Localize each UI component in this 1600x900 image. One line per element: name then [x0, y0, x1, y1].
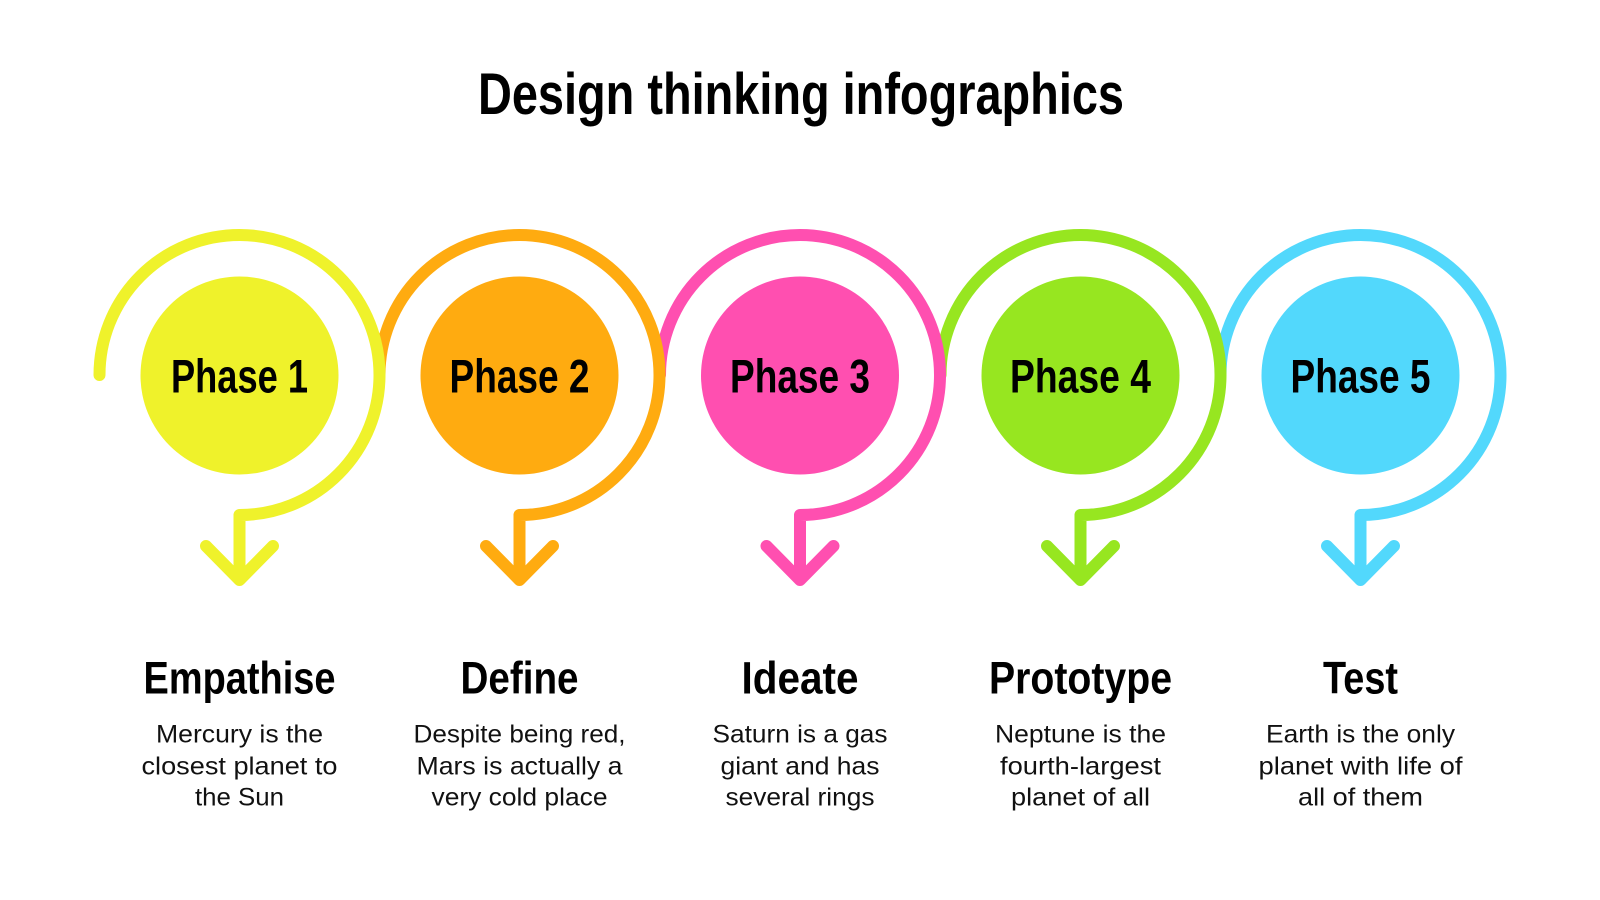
text block: Define: Mars is actually a — [416, 752, 623, 780]
text block: Ideate: Ideate — [742, 652, 858, 704]
title: Design thinking infographics — [478, 62, 1124, 127]
text block: Define: Despite being red, — [414, 721, 626, 749]
text block: Test: Earth is the only — [1266, 721, 1456, 749]
text block: Empathise: the Sun — [195, 784, 284, 812]
text block: Empathise: Mercury is the — [156, 721, 323, 749]
text block: Test: all of them — [1298, 784, 1423, 812]
text block: Ideate: giant and has — [720, 752, 880, 780]
text block: Empathise — [142, 652, 338, 812]
arrow: phase 1 spiral — [100, 235, 380, 580]
phase 4 circle — [982, 276, 1180, 474]
text block: Define — [414, 652, 626, 812]
text block: Empathise: closest planet to — [142, 752, 338, 780]
text block: Empathise: Empathise — [144, 652, 336, 704]
arrow: phase 2 spiral — [380, 235, 660, 580]
text block: Test: Test — [1323, 652, 1398, 704]
text block: Ideate: Saturn is a gas — [712, 721, 888, 749]
text block: Test: planet with life of — [1258, 752, 1463, 780]
text block: Prototype: Prototype — [989, 652, 1172, 704]
phase 4 circle: Phase 4 — [1010, 350, 1151, 402]
text block: Prototype: Neptune is the — [995, 721, 1166, 749]
arrow: phase 5 spiral — [1220, 235, 1500, 580]
phase 1 circle: Phase 1 — [171, 350, 308, 402]
text block: Prototype: planet of all — [1011, 784, 1150, 812]
text block: Define: very cold place — [432, 784, 608, 812]
phase 3 circle: Phase 3 — [730, 350, 870, 402]
phase 5 circle: Phase 5 — [1290, 350, 1430, 402]
text block: Prototype — [989, 652, 1172, 812]
arrow: phase 4 spiral — [940, 235, 1220, 580]
text block: Ideate: several rings — [726, 784, 874, 812]
phase 2 circle: Phase 2 — [450, 350, 590, 402]
phase 2 circle — [420, 276, 618, 474]
text block: Define: Define — [460, 652, 578, 704]
text block: Ideate — [712, 652, 888, 812]
text block: Prototype: fourth-largest — [1000, 752, 1161, 780]
arrow: phase 3 spiral — [660, 235, 940, 580]
phase 3 circle — [701, 276, 899, 474]
text block: Test — [1258, 652, 1463, 812]
phase 1 circle — [140, 276, 338, 474]
phase 5 circle — [1262, 276, 1460, 474]
